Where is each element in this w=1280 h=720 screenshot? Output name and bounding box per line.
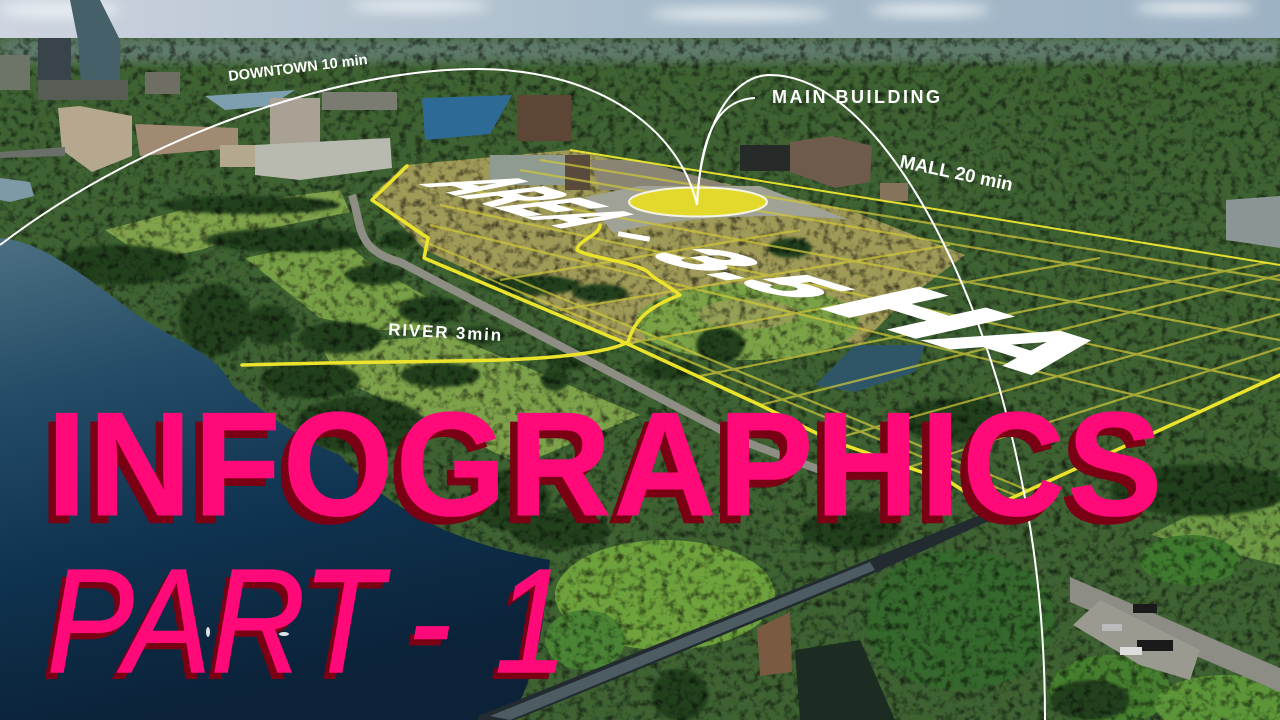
river	[0, 238, 550, 720]
thick yellow boundary	[242, 166, 1280, 508]
lower park lawn	[320, 335, 640, 465]
right edge office building	[1226, 196, 1280, 248]
label: main building: MAIN BUILDING	[772, 87, 940, 107]
riverside buildings	[135, 92, 397, 180]
boats	[206, 627, 289, 637]
yellow grid	[420, 160, 1280, 530]
label: river: RIVER 3min	[388, 320, 502, 345]
top site boundary line	[570, 150, 1280, 265]
distant haze band	[0, 38, 1280, 62]
label: downtown: DOWNTOWN 10 min	[228, 52, 368, 85]
lower creek under bridge	[795, 640, 895, 720]
road along site	[352, 195, 820, 470]
right road with parking	[1070, 577, 1280, 692]
glass pavilion and parking structure	[490, 155, 745, 190]
title: INFOGRAPHICS: INFOGRAPHICS	[47, 382, 1165, 547]
perspective text: AREA - 3.5 HA: 3.5	[625, 244, 879, 302]
perspective text: AREA - 3.5 HA: AREA	[396, 172, 669, 231]
downtown skyline	[0, 0, 180, 100]
pond	[815, 345, 925, 392]
label: mall: MALL 20 min	[898, 150, 1015, 195]
main building marker	[629, 188, 767, 216]
title: PART - 1	[44, 539, 567, 704]
title: PART - 1: 1	[495, 539, 567, 704]
glass office tower	[422, 95, 512, 140]
railway bridge	[478, 513, 1000, 720]
road left	[0, 147, 65, 158]
sky with clouds	[0, 0, 1280, 42]
dark office block and brown offices	[740, 136, 908, 201]
title: PART - 1: -	[408, 539, 451, 704]
hotel building	[58, 106, 132, 172]
middle park lawn	[245, 238, 432, 330]
main building plaza	[585, 186, 850, 233]
upper park lawn	[105, 190, 350, 260]
perspective text: AREA - 3.5 HA: HA	[788, 279, 1155, 380]
title: PART - 1: PART	[47, 539, 382, 704]
brown office tower	[517, 95, 571, 141]
lower right clearing	[1150, 500, 1280, 565]
round lawn	[636, 284, 860, 360]
tree clumps	[50, 196, 1280, 720]
riverside bright trees	[555, 540, 775, 650]
white connector arcs	[0, 69, 1045, 720]
river upstream bits	[0, 90, 295, 202]
site ground	[372, 150, 965, 345]
perspective text: AREA - 3.5 HA	[396, 172, 1155, 380]
